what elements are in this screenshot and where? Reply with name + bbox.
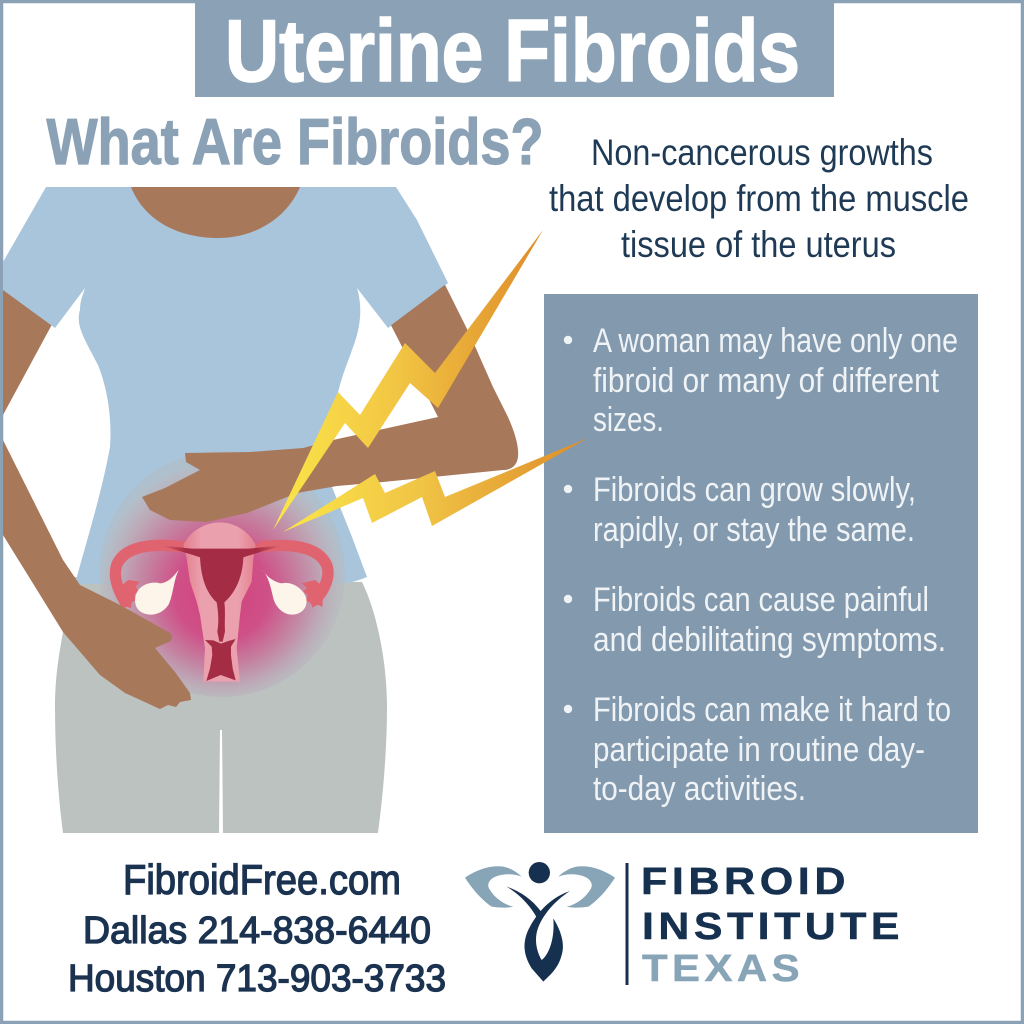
fact list: Fibroids can grow slowly, <box>593 471 916 509</box>
lightning bolt upper <box>273 230 543 530</box>
definition text <box>549 132 969 265</box>
definition text: that develop from the muscle <box>549 178 969 219</box>
contact details <box>68 856 446 1000</box>
logo: fibroid institute texas <box>465 861 904 990</box>
fallopian tubes <box>115 545 328 602</box>
fact list: and debilitating symptoms. <box>593 621 946 659</box>
definition text: Non-cancerous growths <box>591 132 933 173</box>
logo wordmark: FIBROID <box>641 861 850 903</box>
logo wordmark <box>641 861 904 990</box>
pain halo <box>99 451 345 697</box>
pants <box>55 577 387 833</box>
contact details: Dallas 214-838-6440 <box>83 910 431 952</box>
logo wordmark: INSTITUTE <box>642 906 904 948</box>
fact list: sizes. <box>593 401 664 439</box>
fact list <box>564 322 958 808</box>
uterine cavity <box>162 546 282 642</box>
logo divider <box>626 863 628 985</box>
fact list: A woman may have only one <box>593 322 958 360</box>
logo mark <box>465 862 615 982</box>
title banner: Uterine Fibroids <box>225 1 800 100</box>
contact details: Houston 713-903-3733 <box>68 958 446 1000</box>
fact list: rapidly, or stay the same. <box>593 511 915 549</box>
neck <box>131 187 300 238</box>
logo wordmark: TEXAS <box>642 948 804 990</box>
lightning bolt lower <box>283 438 588 532</box>
uterus diagram <box>115 522 328 682</box>
uterus body <box>183 522 256 682</box>
fact list: Fibroids can cause painful <box>593 581 929 619</box>
illustration: woman with abdominal pain <box>3 187 588 833</box>
panel: fibroid facts <box>544 294 978 833</box>
fact list: to-day activities. <box>593 770 806 808</box>
bent arm and hand on belly <box>142 285 518 522</box>
fimbriae <box>120 580 323 608</box>
fact list: Fibroids can make it hard to <box>593 691 951 729</box>
fact list: participate in routine day- <box>593 731 925 769</box>
heading: what are fibroids: What Are Fibroids? <box>46 105 544 178</box>
ovaries <box>135 569 307 615</box>
contact details: FibroidFree.com <box>123 856 401 903</box>
definition text: tissue of the uterus <box>621 224 896 265</box>
lower left arm and hand <box>3 440 191 709</box>
fact list: fibroid or many of different <box>593 362 939 400</box>
cervical canal <box>205 639 236 681</box>
shirt <box>3 187 448 584</box>
upper left arm <box>3 280 56 415</box>
